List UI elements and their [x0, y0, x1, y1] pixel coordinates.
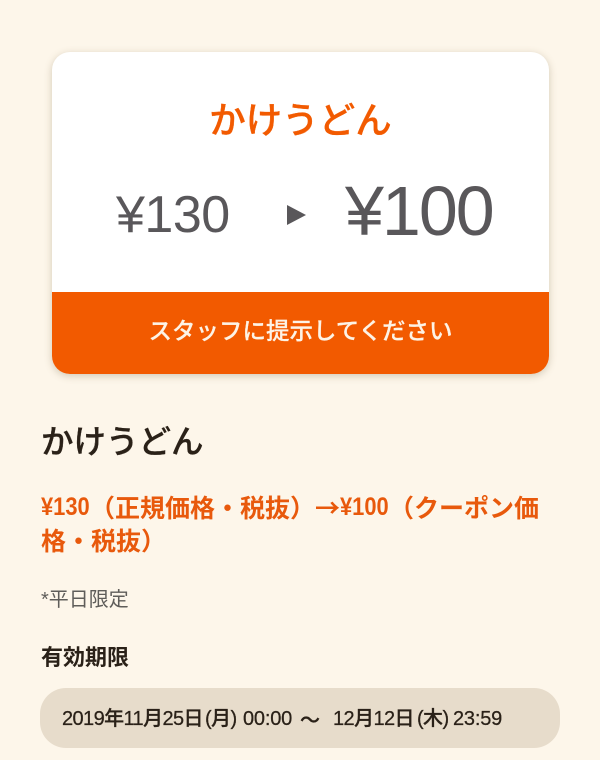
panel: coupon card [52, 52, 549, 374]
validity dates [62, 704, 502, 733]
price line 1: → [315, 489, 340, 525]
banner: show to staff [52, 292, 549, 374]
note: *平日限定 [41, 589, 129, 611]
validity dates: 23:59 [453, 708, 502, 730]
validity dates: ～ [300, 704, 319, 733]
price line 1: （正規価格・税抜） [90, 489, 315, 525]
icon: arrow [287, 205, 306, 225]
regular price: ¥130 [116, 186, 230, 244]
price line 1: （クーポン価 [389, 489, 539, 525]
validity dates: 2019年11月25日 [62, 708, 203, 730]
price line 1: ¥130 [41, 493, 90, 521]
validity dates: 00:00 [243, 708, 292, 730]
validity label: 有効期限 [41, 645, 129, 670]
validity dates: (木) [417, 708, 449, 730]
price line 1: ¥100 [340, 493, 389, 521]
price description [41, 489, 539, 558]
card title: かけうどん [209, 100, 392, 141]
price line 1 [41, 489, 539, 525]
price line 2: 格・税抜） [41, 522, 166, 558]
banner text: スタッフに提示してください [148, 318, 453, 344]
validity dates: (月) [205, 708, 237, 730]
coupon price: ¥100 [345, 172, 493, 250]
validity period pill [40, 688, 560, 748]
heading: かけうどん [41, 424, 204, 460]
validity dates: 12月12日 [333, 708, 414, 730]
